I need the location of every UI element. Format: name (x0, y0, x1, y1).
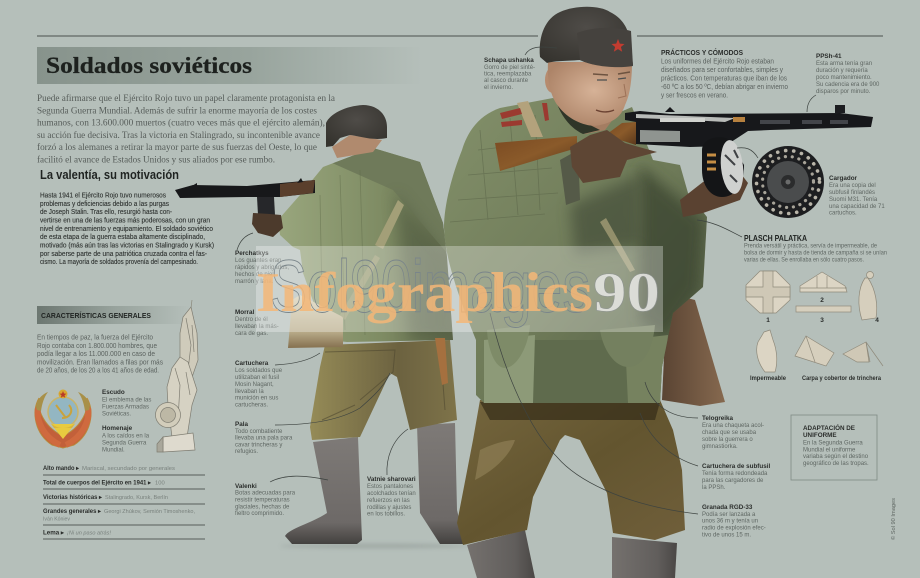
text block: fuerza del ejército: de 20 años, de los 20 a los 41 años de edad. (37, 366, 159, 375)
row: total de cuerpos: 100 (155, 480, 165, 486)
text block: prácticos y cómodos: Los uniformes del Ejército Rojo estaban (661, 56, 774, 66)
text block: motivación (40, 192, 214, 266)
head (545, 62, 632, 126)
label: perchatkys: rápidos y abrigados, (235, 265, 289, 271)
row: grandes generales: Georgi Zhúkov, Semión Timoshenko, (104, 509, 195, 515)
satchel (288, 255, 380, 348)
label: telogreika: chada que se usaba (702, 430, 757, 436)
floor shadow (280, 544, 470, 548)
label: cartuchera (235, 360, 283, 408)
panel: características generales (35, 300, 205, 539)
label: telogreika: gimnastiorka. (702, 444, 738, 450)
label: pala: refugios. (235, 449, 258, 455)
callout: adaptación de uniforme (791, 415, 877, 480)
label: morral (235, 309, 279, 337)
label: cartuchera de subfusil: la PPSh. (702, 485, 726, 491)
bag (662, 293, 725, 406)
heading: características (37, 306, 190, 324)
drawing: raincoat (757, 330, 777, 372)
label: cartuchera: munición en sus (235, 396, 278, 402)
text: homenaje: Homenaje (102, 425, 133, 432)
gun (495, 105, 873, 171)
label: vatnie sharovari: en los tobillos. (367, 512, 405, 518)
label: valenki: resistir temperaturas (235, 498, 290, 504)
text block: fuerza del ejército (37, 332, 163, 375)
text block: motivación: cismo. La mayoría de soldados provenía del campesinado. (40, 259, 198, 266)
collar (555, 98, 600, 134)
row: grandes generales: Grandes generales ▸ (43, 508, 102, 515)
intro text block: Segunda Guerra Mundial. Además de sufrir la enorme mayoría de los costes (37, 105, 317, 116)
right glove (680, 170, 748, 217)
text: homenaje (102, 425, 150, 454)
label: cargador (829, 175, 885, 216)
label: cartuchera: Mosin Nagant, (235, 382, 274, 388)
credit: © Sol 90 Images (890, 498, 897, 540)
left boot (467, 530, 535, 578)
text block: motivación: Hasta 1941 el Ejército Rojo tuvo numerosos (40, 192, 166, 200)
row: total de cuerpos (43, 480, 205, 489)
boots (285, 423, 465, 544)
label: telogreika (702, 415, 764, 450)
trousers (457, 400, 685, 545)
row: lema: ¡Ni un paso atrás! (67, 530, 111, 536)
label: PPSh-41 (816, 53, 880, 95)
row: grandes generales: Iván Kóniev (43, 516, 70, 522)
callout: adaptación de uniforme: geográfico de las tropas. (803, 461, 869, 467)
label: morral: llevaban la más- (235, 324, 279, 330)
label: morral: Morral (235, 309, 254, 316)
label: schapa ushanka: Gorro de piel sinté- (484, 65, 535, 71)
data rows (43, 465, 205, 539)
intro text block: su acción fue decisiva. Tras la victoria en Stalingrado, su incontenible avance (37, 130, 320, 141)
callout leaders (237, 47, 816, 514)
label: cargador: cartuchos. (829, 210, 857, 216)
row: alto mando: Mariscal, secundado por generales (82, 466, 175, 472)
text block: prácticos y cómodos: -60 ºC a los 50 ºC, debían abrigar en invierno (661, 82, 788, 91)
label: cartuchera: cartucheras. (235, 402, 268, 408)
label: perchatkys: hechos de piel (235, 272, 274, 278)
text block: prácticos y cómodos (661, 48, 788, 100)
icon: red star (612, 39, 624, 52)
callout: adaptación de uniforme: En la Segunda Guerra (803, 440, 863, 446)
ushanka hat (540, 7, 633, 67)
intro text block: forzó a los alemanes a retirar la mayor parte de sus fuerzas del Oeste, lo que (37, 142, 317, 153)
label: cartuchera: Los soldados que (235, 368, 283, 374)
label: perchatkys: Perchatkys (235, 250, 269, 257)
text: escudo: El emblema de las (102, 398, 151, 404)
intro text block: humanos, con 13.600.000 muertos (cuatro veces más que el ejército alemán), (37, 118, 325, 129)
row: alto mando (43, 465, 205, 475)
text block: fuerza del ejército: podía llegar a los 11.000.000 en caso de (37, 349, 155, 358)
label: granada: unos 36 m y tenía un (702, 518, 758, 524)
label: PPSh-41: PPSh-41 (816, 53, 842, 60)
panel: plasch palatka (744, 233, 887, 382)
label: perchatkys: Los guantes eran (235, 258, 281, 264)
label: pala: cavar trincheras y (235, 442, 282, 448)
label: cartuchera de subfusil: para las cargadores de (702, 478, 764, 484)
heading and text (744, 233, 887, 264)
label: cartuchera de subfusil: Tenía forma redondeada (702, 471, 768, 477)
label: PPSh-41: Su cadencia era de 900 (816, 82, 880, 88)
text: escudo: Fuerzas Armadas (102, 404, 149, 410)
label: PPSh-41: disparos por minuto. (816, 89, 871, 95)
text block: prácticos y cómodos: diseñados para ser confortables, simples y (661, 65, 783, 74)
watermark: Infographics (256, 262, 593, 324)
illustration: soldier from behind (175, 105, 470, 548)
label: valenki (235, 483, 296, 517)
text: homenaje: Mundial. (102, 448, 125, 454)
text: homenaje: Segunda Guerra (102, 440, 147, 446)
text block: motivación: problemas y deficiencias debido a las purgas (40, 201, 169, 208)
title (37, 47, 422, 84)
top rule lines (37, 35, 883, 37)
intro text block: facilitó el avance de Estados Unidos y sus aliados por ese rumbo. (37, 154, 275, 166)
label: morral: Dentro de él (235, 317, 268, 323)
text: escudo: Escudo (102, 389, 125, 396)
step 2 (800, 272, 847, 304)
row: grandes generales (43, 508, 205, 525)
drawing captions (750, 375, 881, 382)
label: granada: Granada RGD-33 (702, 504, 753, 511)
text block: motivación: por saberse parte de una patriótica cruzada contra el fas- (40, 251, 208, 258)
neck (556, 96, 620, 134)
label: cartuchera de subfusil (702, 463, 770, 491)
label: valenki: Botas adecuadas para (235, 490, 296, 496)
collar insignia (500, 103, 549, 127)
row: lema (43, 530, 205, 539)
row: alto mando: Alto mando ▸ (43, 465, 80, 472)
label: schapa ushanka: tica, reemplazaba (484, 72, 532, 78)
label: cartuchera: utilizaban el fusil (235, 375, 279, 381)
label: valenki: fieltro comprimido. (235, 511, 284, 517)
label: valenki: glaciales, hechas de (235, 504, 290, 510)
label: schapa ushanka (484, 57, 535, 91)
label: vatnie sharovari: refuerzos en las (367, 498, 410, 504)
callout: adaptación de uniforme: variaba según el destino (803, 454, 869, 460)
label: perchatkys (235, 250, 289, 285)
drum on gun (702, 137, 746, 197)
step 4 (859, 272, 879, 324)
label: vatnie sharovari (367, 476, 416, 518)
head and neck (332, 135, 382, 158)
label: morral: cara de gas. (235, 331, 268, 337)
text block: fuerza del ejército: Rojo contaba con 1.800.000 hombres, que (37, 341, 157, 350)
right boot (612, 537, 677, 578)
label: telogreika: Era una chaqueta acol- (702, 423, 764, 429)
icon: drum magazine (752, 146, 824, 218)
label: schapa ushanka: al casco durante (484, 78, 529, 84)
title: Soldados soviéticos (46, 53, 252, 78)
drawing: trench cover (843, 342, 883, 366)
shovel handle (435, 338, 448, 385)
heading and text: Prenda versátil y práctica, servía de impermeable, de (744, 244, 878, 250)
heading and text: varias de ellas. Se enrollaba en sólo cuatro pasos. (744, 258, 864, 264)
heading: características: CARACTERÍSTICAS GENERALES (41, 311, 151, 320)
step 3 (796, 306, 851, 324)
intro text block: Puede afirmarse que el Ejército Rojo tuvo un papel claramente protagonista en la (37, 93, 336, 104)
text block: fuerza del ejército: movilización. Eran llamados a filas por más (37, 357, 163, 366)
label: cargador: Suomi M31. Tenía (829, 197, 878, 203)
row: victorias históricas: Stalingrado, Kursk, Berlín (105, 495, 168, 501)
text: escudo (102, 389, 151, 418)
step 1 (746, 271, 790, 324)
drawing captions: Carpa y cobertor de trinchera (802, 375, 881, 382)
label: pala (235, 421, 293, 455)
label: vatnie sharovari: Vatnie sharovari (367, 476, 416, 483)
label: PPSh-41: Esta arma tenía gran (816, 61, 872, 67)
callout: adaptación de uniforme: ADAPTACIÓN DE (803, 423, 855, 432)
text block: motivación: nivel de entrenamiento y equipamiento. El soldado soviético (40, 226, 213, 233)
icon: statue (156, 300, 198, 452)
watermark: 90 (593, 262, 660, 324)
label: valenki: Valenki (235, 483, 257, 490)
label: cargador: una capacidad de 71 (829, 204, 885, 210)
step 4: 4 (875, 317, 879, 324)
label: cargador: Era una copia del (829, 183, 876, 189)
label: pala: llevaba una pala para (235, 436, 293, 442)
jacket (278, 148, 453, 342)
left glove (570, 130, 657, 183)
row: victorias históricas (43, 494, 205, 504)
row: total de cuerpos: Total de cuerpos del Ejército en 1941 ▸ (43, 480, 152, 486)
label: granada: radio de explosión efec- (702, 526, 766, 532)
label: telogreika: sobre la guerrera o (702, 437, 753, 443)
row: lema: Lema ▸ (43, 530, 65, 536)
label: cartuchera de subfusil: Cartuchera de subfusil (702, 463, 770, 470)
step 1: 1 (766, 317, 770, 324)
label: schapa ushanka: el invierno. (484, 85, 513, 91)
callout: adaptación de uniforme: Mundial el uniforme (803, 448, 856, 454)
text: homenaje: A los caídos en la (102, 434, 150, 440)
label: cargador: Cargador (829, 175, 858, 182)
step 2: 2 (820, 297, 824, 304)
label: cargador: subfusil finlandés (829, 190, 875, 196)
icon: emblem of USSR (35, 390, 91, 448)
glove (252, 213, 283, 237)
label: cartuchera: llevaban la (235, 389, 264, 395)
label: granada: tivo de unos 15 m. (702, 532, 751, 538)
label: PPSh-41: duración y requería (816, 68, 868, 74)
intro text block (37, 93, 336, 166)
text: escudo: Soviéticas. (102, 412, 131, 418)
step 3: 3 (820, 317, 824, 324)
trousers (310, 340, 457, 440)
drawing captions: Impermeable (750, 375, 786, 382)
label: PPSh-41: poco mantenimiento. (816, 75, 872, 81)
label: pala: Pala (235, 421, 248, 428)
text block: fuerza del ejército: En tiempos de paz, la fuerza del Ejército (37, 332, 153, 342)
illustration: front soldier (444, 7, 873, 578)
heading and text: bolsa de dormir y hasta de tienda de campaña si se unían (744, 250, 887, 256)
label: vatnie sharovari: rodillas y ajustes (367, 505, 411, 511)
text block: motivación: motivado (más aún tras las victorias en Stalingrado y Kursk) (40, 242, 214, 250)
label: vatnie sharovari: acolchados tenían (367, 491, 416, 497)
row: victorias históricas: Victorias históricas ▸ (43, 494, 103, 501)
label: perchatkys: marrón y lana. (235, 279, 274, 285)
drawing: tent (795, 336, 834, 366)
shoulder strap (517, 101, 543, 137)
text block: prácticos y cómodos: PRÁCTICOS Y CÓMODOS (661, 48, 743, 57)
label: cartuchera: Cartuchera (235, 360, 269, 367)
text block: motivación: vertirse en una de las fuerzas más poderosas, con un gran (40, 218, 210, 224)
label: telogreika: Telogreika (702, 415, 734, 422)
callout: adaptación de uniforme: UNIFORME (803, 432, 837, 439)
jacket (444, 96, 707, 403)
label: schapa ushanka: Schapa ushanka (484, 57, 534, 64)
watermark: Sol90images (270, 245, 590, 328)
text block: motivación: de esta etapa de la guerra estaba altamente disciplinado, (40, 234, 205, 241)
submachine gun (175, 178, 315, 215)
text block: prácticos y cómodos: prácticos. Con temperaturas que iban de los (661, 74, 787, 82)
text block: prácticos y cómodos: y ser frescos en verano. (661, 90, 728, 100)
ushanka hat (326, 105, 387, 147)
heading and text: PLASCH PALATKA (744, 233, 807, 243)
label: vatnie sharovari: Estos pantalones (367, 484, 413, 490)
label: pala: Todo combatiente (235, 429, 283, 435)
label: granada (702, 504, 766, 538)
heading: la valentía: La valentía, su motivación (40, 168, 179, 182)
text block: motivación: de Joseph Stalin. Tras ello, resurgió hasta con- (40, 209, 173, 216)
label: granada: Podía ser lanzada a (702, 512, 756, 518)
